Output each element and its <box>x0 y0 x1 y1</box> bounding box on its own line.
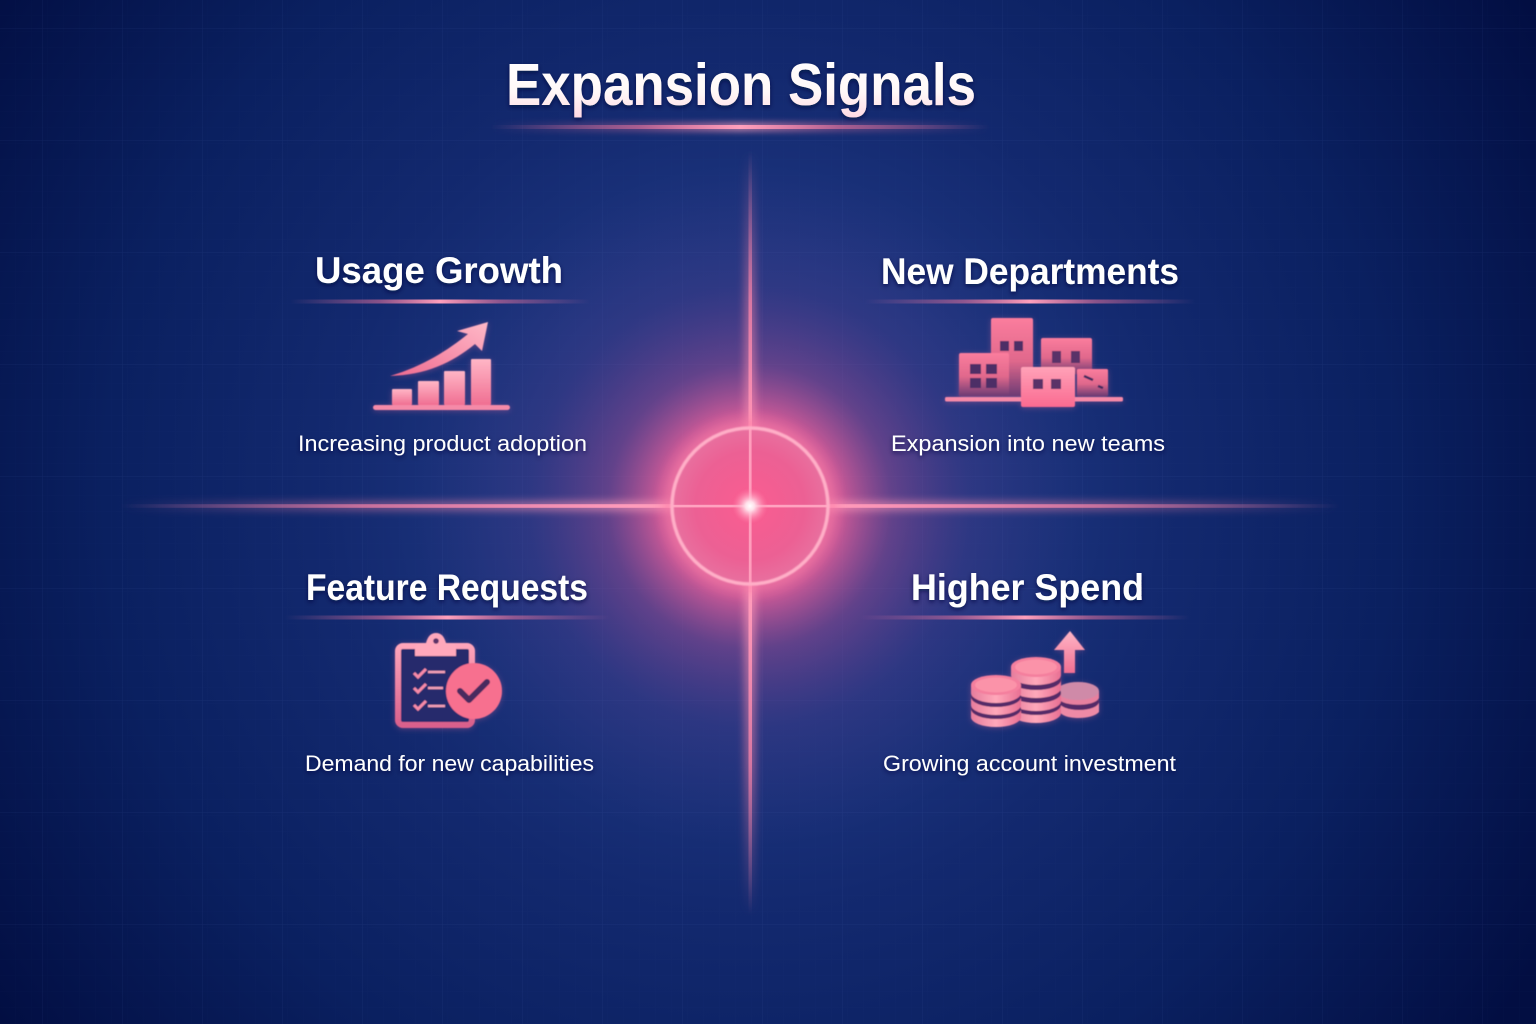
panel: feature requests <box>285 567 610 776</box>
heading: new departments: New Departments <box>881 251 1179 292</box>
title underline <box>490 122 990 132</box>
title: Expansion Signals <box>506 52 976 118</box>
icon: office buildings <box>945 318 1123 407</box>
heading: usage growth: Usage Growth <box>315 250 563 291</box>
horizontal axis line <box>120 501 1340 511</box>
underline: higher spend <box>860 616 1190 620</box>
description: new departments: Expansion into new teams <box>891 431 1165 456</box>
icon: clipboard with checkmark <box>398 633 502 725</box>
description: feature requests: Demand for new capabilities <box>305 751 594 776</box>
panel: higher spend <box>860 567 1190 776</box>
underline: usage growth <box>290 300 590 304</box>
central circle node <box>670 426 830 586</box>
central glow halo <box>410 166 1090 846</box>
underline: feature requests <box>285 616 610 620</box>
description: usage growth: Increasing product adoption <box>298 431 587 456</box>
description: higher spend: Growing account investment <box>883 751 1177 776</box>
underline: new departments <box>865 300 1195 304</box>
icon: coin stacks with up arrow <box>971 631 1099 727</box>
icon: growth chart with arrow <box>373 322 510 410</box>
heading: feature requests: Feature Requests <box>306 567 588 608</box>
vertical axis line <box>744 150 756 915</box>
panel: usage growth <box>290 250 590 456</box>
panel: new departments <box>865 251 1195 456</box>
heading: higher spend: Higher Spend <box>911 567 1144 608</box>
